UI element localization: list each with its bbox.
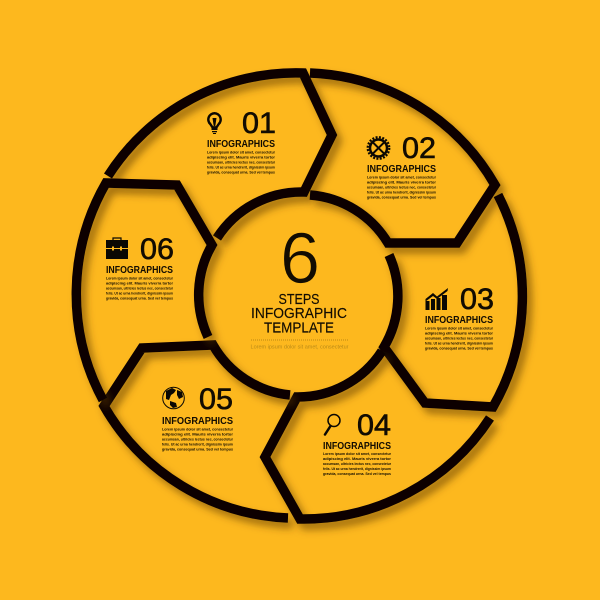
number 03: 03 — [460, 283, 494, 316]
text block 01: felis. Ut ac urna hendrerit, dignissim ipsum — [207, 166, 275, 170]
text block 04: Lorem ipsum dolor sit amet, consectetur — [323, 452, 392, 456]
dotted divider — [251, 339, 348, 341]
text block 06: accumsan, ultricies lectus nec, consectetur — [106, 286, 174, 290]
text block 05: adipiscing elit. Mauris viverra tortor — [162, 432, 234, 436]
icon: magnifier — [325, 414, 340, 434]
text block 05: gravida, consequat urna. Sed vel tempus — [162, 448, 233, 452]
heading 01: INFOGRAPHICS — [207, 138, 275, 150]
panel: step 01 — [108, 73, 332, 238]
text block 03 — [425, 326, 494, 350]
text block 03: gravida, consequat urna. Sed vel tempus — [425, 346, 493, 350]
text block 04: gravida, consequat urna. Sed vel tempus — [323, 472, 391, 476]
text block 02: Lorem ipsum dolor sit amet, consectetur — [367, 176, 437, 180]
text block 02: gravida, consequat urna. Sed vel tempus — [367, 196, 436, 200]
text block 06: felis. Ut ac urna hendrerit, dignissim ipsum — [106, 292, 173, 296]
text block 06: gravida, consequat urna. Sed vel tempus — [106, 296, 173, 300]
text block 05: accumsan, ultricies lectus nec, consectetur — [162, 438, 234, 442]
big number 6: 6 — [280, 219, 320, 299]
text block 01: adipiscing elit. Mauris viverra tortor — [207, 156, 276, 160]
text block 02: accumsan, ultricies lectus nec, consectetur — [367, 186, 437, 190]
text block 04 — [323, 452, 392, 476]
text block 05: felis. Ut ac urna hendrerit, dignissim ipsum — [162, 442, 233, 446]
segment outline 02 — [310, 73, 495, 243]
title: steps infographic template — [251, 292, 347, 336]
number 06: 06 — [140, 233, 174, 266]
text block 01 — [207, 150, 276, 174]
title: steps infographic template: TEMPLATE — [264, 320, 334, 336]
number 01: 01 — [242, 107, 276, 140]
panel: step 03 — [384, 195, 522, 407]
heading 02: INFOGRAPHICS — [367, 163, 436, 175]
heading 03: INFOGRAPHICS — [425, 314, 493, 326]
text block 06 — [106, 276, 174, 300]
text block 02: felis. Ut ac urna hendrerit, dignissim ipsum — [367, 190, 436, 194]
title: steps infographic template: STEPS — [278, 292, 320, 308]
text block 01: accumsan, ultricies lectus nec, consectetur — [207, 160, 276, 164]
text block 04: accumsan, ultricies lectus nec, consectetur — [323, 462, 392, 466]
number 05: 05 — [199, 383, 233, 416]
text block 03: adipiscing elit. Mauris viverra tortor — [425, 332, 494, 336]
icon: briefcase — [106, 238, 128, 259]
icon: globe — [163, 387, 184, 409]
number 04: 04 — [357, 409, 391, 442]
panel: step 02 — [310, 73, 495, 243]
text block 03: Lorem ipsum dolor sit amet, consectetur — [425, 326, 494, 330]
segment outline 01 — [108, 73, 332, 238]
segment outline 03 — [384, 195, 522, 407]
heading 04: INFOGRAPHICS — [323, 440, 391, 452]
panel: step 06 — [76, 183, 212, 400]
text block 05: Lorem ipsum dolor sit amet, consectetur — [162, 428, 234, 432]
text block 06: Lorem ipsum dolor sit amet, consectetur — [106, 276, 174, 280]
text block 05 — [162, 428, 234, 452]
subtitle: Lorem ipsum dolor sit amet, consectetur — [250, 344, 349, 350]
title: steps infographic template: INFOGRAPHIC — [251, 306, 347, 322]
panel: step 04 — [265, 351, 490, 519]
text block 01: Lorem ipsum dolor sit amet, consectetur — [207, 150, 276, 154]
number 02: 02 — [402, 132, 436, 165]
text block 04: adipiscing elit. Mauris viverra tortor — [323, 457, 392, 461]
text block 04: felis. Ut ac urna hendrerit, dignissim ipsum — [323, 467, 391, 471]
icon: gear — [368, 137, 389, 159]
heading 05: INFOGRAPHICS — [162, 415, 233, 427]
text block 02 — [367, 176, 437, 200]
panel: center title — [250, 219, 349, 350]
heading 06: INFOGRAPHICS — [106, 264, 173, 276]
text block 02: adipiscing elit. Mauris viverra tortor — [367, 180, 437, 184]
icon: bar chart with trend line — [426, 288, 448, 310]
text block 03: accumsan, ultricies lectus nec, consectetur — [425, 336, 494, 340]
segment outline 04 — [265, 351, 490, 519]
icon: light bulb — [207, 112, 222, 134]
segment outline 06 — [76, 183, 212, 400]
panel: step 05 — [104, 345, 290, 518]
text block 03: felis. Ut ac urna hendrerit, dignissim ipsum — [425, 342, 493, 346]
text block 06: adipiscing elit. Mauris viverra tortor — [106, 282, 174, 286]
text block 01: gravida, consequat urna. Sed vel tempus — [207, 170, 275, 174]
segment outline 05 — [104, 345, 290, 518]
